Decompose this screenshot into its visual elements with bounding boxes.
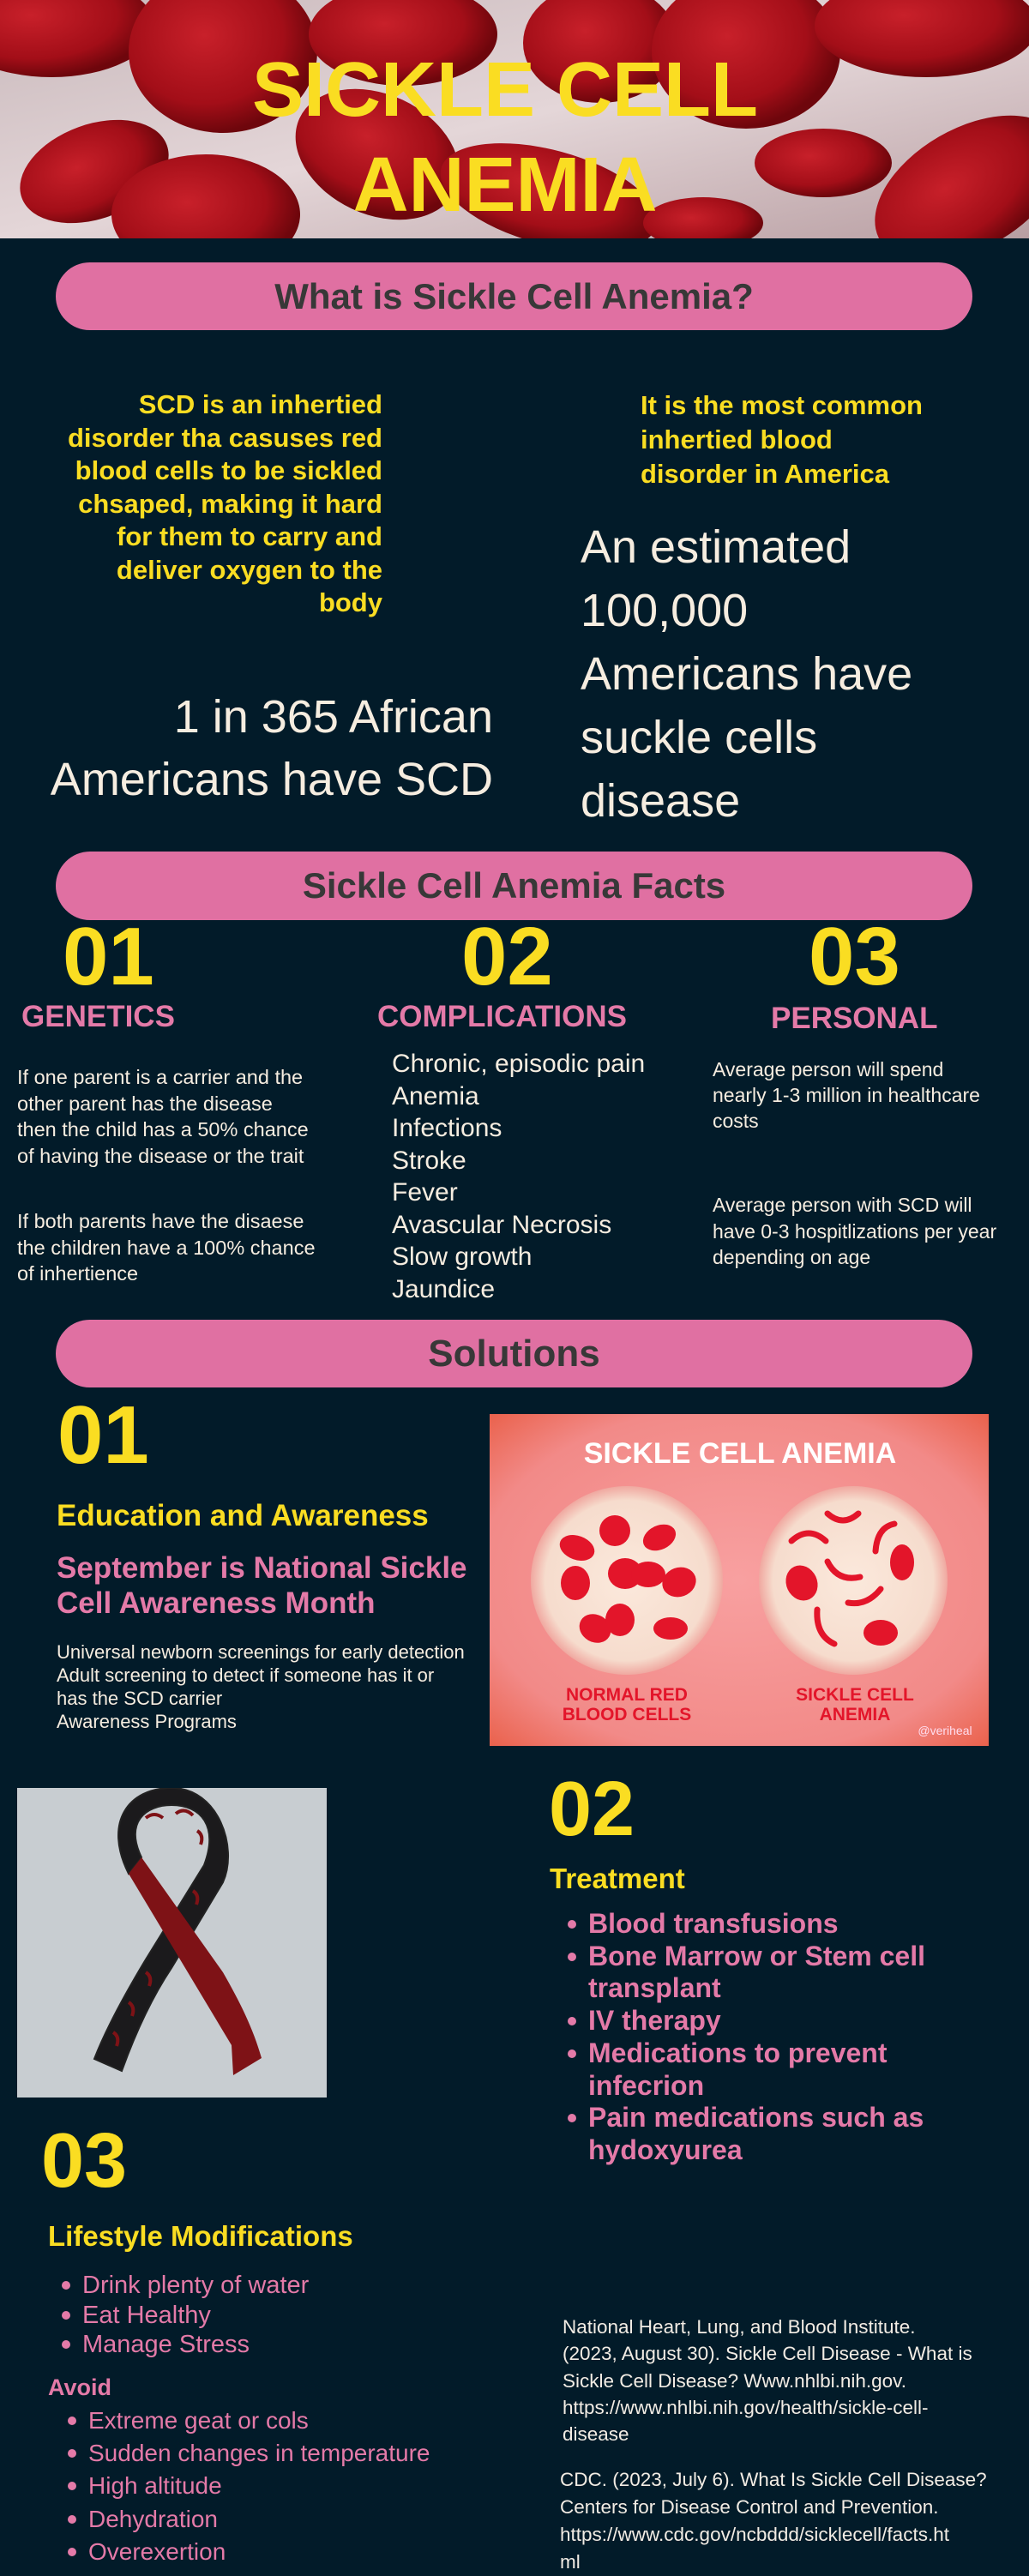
complications list: Chronic, episodic pain [392,1050,645,1078]
reference CDC [560,2469,987,2573]
number 02: 02 [461,911,553,1002]
personal text 1: costs [713,1110,759,1132]
stat: 1 in 365: 1 in 365 African [174,691,493,743]
text block: most common: disorder in America [641,459,889,489]
text block: SCD definition [68,389,382,617]
treatment list: Pain medications such as [588,2102,924,2133]
awareness month: Cell Awareness Month [57,1586,375,1620]
reference CDC: https://www.cdc.gov/ncbddd/sicklecell/facts.ht [560,2524,949,2545]
header banner image [0,0,1029,238]
complications list: Stroke [392,1146,466,1175]
personal text 1: nearly 1-3 million in healthcare [713,1084,980,1106]
education text: Universal newborn screenings for early detection [57,1641,465,1663]
complications list: Avascular Necrosis [392,1211,611,1238]
references: (2023, August 30). Sickle Cell Disease - What is [563,2343,972,2364]
avoid list: High altitude [88,2472,222,2499]
heading lifestyle: Lifestyle Modifications [48,2220,353,2252]
fact 02: complications [377,911,645,1303]
black loop & left tail [94,1788,228,2071]
heading genetics: GENETICS [21,1000,175,1033]
references: disease [563,2423,629,2445]
title [252,47,758,228]
number 02: 02 [549,1766,635,1852]
education text: Awareness Programs [57,1711,237,1732]
genetics text 2: of inhertience [17,1262,138,1285]
education text [57,1641,465,1732]
title: SICKLE CELL [252,47,758,133]
awareness month [57,1551,467,1620]
lifestyle list: Eat Healthy [82,2302,211,2329]
personal text 2: depending on age [713,1246,870,1268]
heading treatment: Treatment [550,1863,685,1894]
genetics text 2 [17,1210,316,1285]
stat: 1 in 365 [50,691,493,805]
avoid list: Extreme geat or cols [88,2407,309,2434]
treatment list: transplant [588,1972,721,2003]
image: sickle cell illustration [490,1414,989,1746]
image: awareness ribbon [17,1788,327,2098]
image: sickle cell illustration: BLOOD CELLS [563,1705,691,1724]
image: sickle cell illustration: ANEMIA [820,1705,890,1724]
fact 01: genetics [17,911,316,1285]
genetics text: If one parent is a carrier and the [17,1066,303,1088]
stat: 100,000 Americans: An estimated [581,521,851,573]
text block: SCD definition: disorder tha casuses red [68,422,382,453]
lifestyle list: Drink plenty of water [82,2272,309,2299]
stat: 100,000 Americans: disease [581,775,740,827]
red band [129,1857,262,2075]
complications list: Infections [392,1114,502,1142]
heading pill: Solutions [56,1320,972,1387]
number 01: 01 [57,1389,149,1481]
text block: SCD definition: chsaped, making it hard [78,489,382,518]
image: sickle cell illustration: NORMAL RED [566,1685,688,1705]
genetics text: other parent has the disease [17,1092,273,1115]
reference CDC: ml [560,2551,581,2573]
treatment list: hydoxyurea [588,2134,743,2165]
number 03: 03 [809,911,900,1002]
title: ANEMIA [353,142,657,228]
heading pill: Solutions: Solutions [428,1333,600,1375]
treatment list: Blood transfusions [588,1908,839,1939]
image: sickle cell illustration: SICKLE CELL ANEMIA [584,1437,896,1470]
text block: SCD definition: SCD is an inhertied [139,389,382,419]
text block: SCD definition: for them to carry and [117,521,382,551]
image: sickle cell illustration: @veriheal [918,1724,972,1737]
lifestyle list [62,2272,309,2358]
treatment list: infecrion [588,2070,704,2101]
lifestyle list: Manage Stress [82,2331,250,2358]
number 03: 03 [41,2118,127,2204]
stat: 100,000 Americans: suckle cells [581,712,817,763]
personal text 1 [713,1058,980,1132]
avoid list: Overexertion [88,2538,226,2565]
stat: 1 in 365: Americans have SCD [51,754,493,805]
avoid list: Sudden changes in temperature [88,2440,430,2466]
stat: 100,000 Americans [581,521,912,827]
heading pill: Facts: Sickle Cell Anemia Facts [303,865,725,906]
references: https://www.nhlbi.nih.gov/health/sickle-cell- [563,2397,928,2418]
stat: 100,000 Americans: 100,000 [581,585,748,636]
personal text 2: have 0-3 hospitlizations per year [713,1219,996,1242]
text block: SCD definition: deliver oxygen to the [117,554,382,585]
heading education: Education and Awareness [57,1499,429,1532]
treatment list: Medications to prevent [588,2037,887,2068]
complications list: Anemia [392,1082,479,1110]
treatment list: IV therapy [588,2005,721,2036]
genetics text [17,1066,309,1167]
education text: has the SCD carrier [57,1688,222,1709]
reference CDC: CDC. (2023, July 6). What Is Sickle Cell Disease? [560,2469,987,2490]
complications list [392,1050,645,1303]
complications list: Fever [392,1178,458,1207]
solution 01: education [57,1389,467,1732]
text block: SCD definition: blood cells to be sickled [75,455,382,485]
stat: 100,000 Americans: Americans have [581,648,912,700]
text block: most common: inhertied blood [641,424,833,454]
personal text 1: Average person will spend [713,1058,943,1080]
genetics text 2: the children have a 100% chance [17,1237,316,1259]
awareness month: September is National Sickle [57,1551,467,1585]
personal text 2 [713,1194,996,1268]
references [563,2316,972,2445]
references: National Heart, Lung, and Blood Institute. [563,2316,916,2338]
treatment list: Bone Marrow or Stem cell [588,1941,925,1971]
heading pill: What is Sickle Cell Anemia: What is Sickle Cell Anemia? [274,276,754,316]
fact 03: personal [713,911,996,1268]
education text: Adult screening to detect if someone has it or [57,1664,434,1686]
genetics text: then the child has a 50% chance [17,1118,309,1141]
avoid list [68,2407,430,2565]
heading complications: COMPLICATIONS [377,1000,627,1033]
text block: SCD definition: body [319,587,382,617]
personal text 2: Average person with SCD will [713,1194,972,1216]
number 01: 01 [63,911,154,1002]
complications list: Slow growth [392,1243,532,1271]
references: Sickle Cell Disease? Www.nhlbi.nih.gov. [563,2370,906,2392]
solution 02: treatment [549,1766,925,2165]
text block: most common: It is the most common [641,390,923,420]
genetics text 2: If both parents have the disaese [17,1210,304,1232]
reference CDC: Centers for Disease Control and Prevention. [560,2496,938,2518]
text block: most common [641,390,923,489]
avoid list: Dehydration [88,2506,218,2532]
image: sickle cell illustration: SICKLE CELL [796,1685,914,1705]
complications list: Jaundice [392,1274,495,1303]
avoid heading: Avoid [48,2374,111,2400]
treatment list [568,1908,925,2165]
genetics text: of having the disease or the trait [17,1144,304,1166]
solution 03: lifestyle [41,2118,430,2565]
heading pill: Facts [56,852,972,920]
heading pill: What is Sickle Cell Anemia [56,262,972,330]
heading personal: PERSONAL [771,1002,937,1035]
